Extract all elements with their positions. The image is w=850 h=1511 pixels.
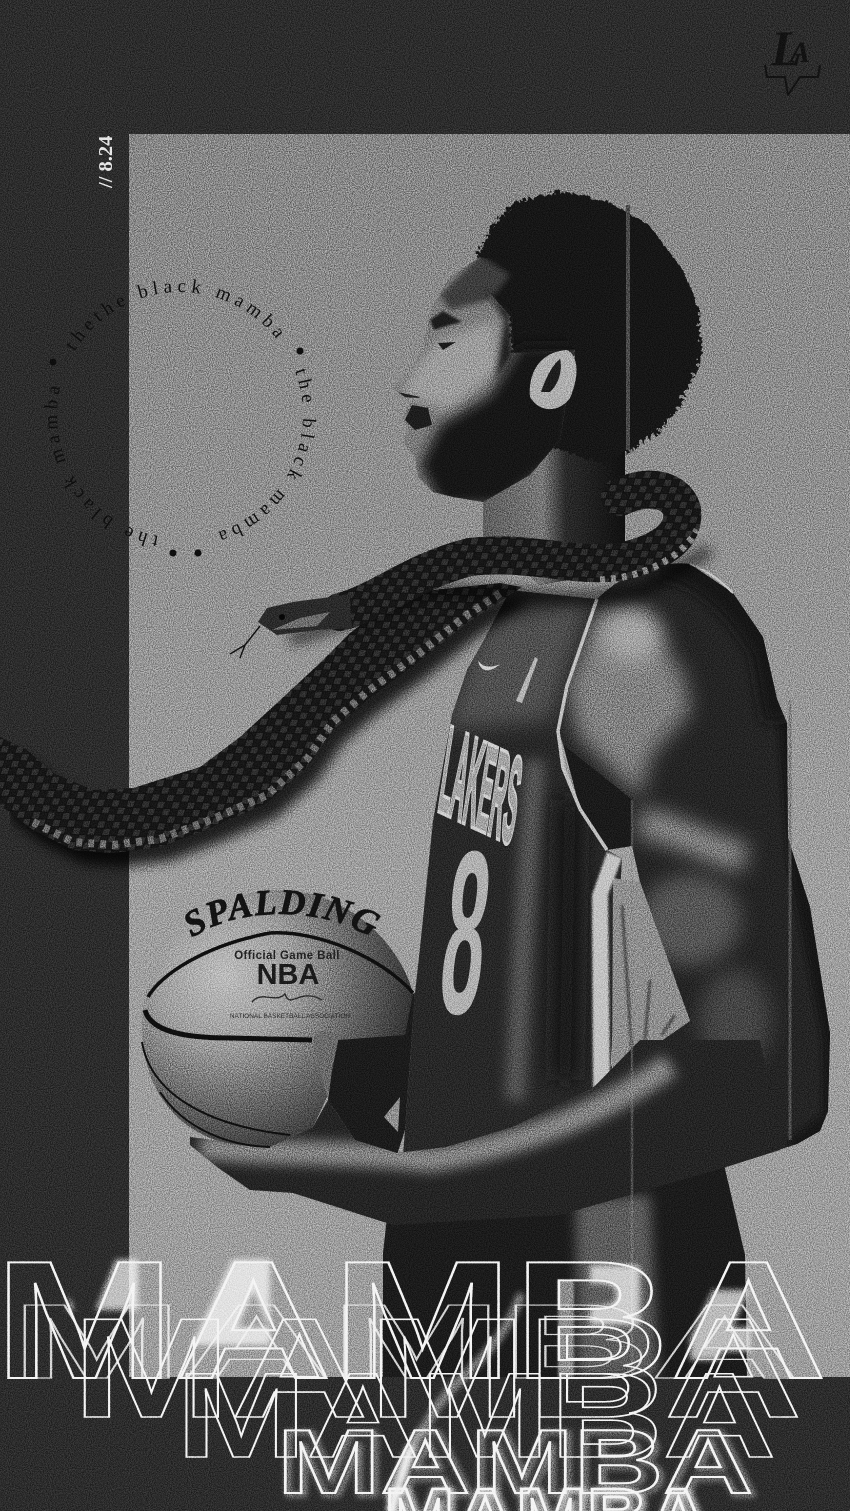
snake lower body <box>0 583 522 853</box>
eye <box>438 342 456 350</box>
shoulder highlight <box>602 610 662 662</box>
thumb <box>313 1031 338 1100</box>
icon: LA logo: L <box>770 20 802 76</box>
hair <box>475 189 700 462</box>
body side panel <box>612 878 690 1078</box>
ball NBA text: NBA <box>257 959 319 991</box>
lower arm mid tone <box>700 970 770 1070</box>
league logo <box>516 657 538 703</box>
player figure <box>190 189 835 1377</box>
vertical glitch streaks <box>628 205 790 1377</box>
forearm <box>190 1040 780 1225</box>
snake eye <box>279 614 285 620</box>
inner ear <box>541 359 561 392</box>
gap between hand and jersey <box>384 1097 400 1132</box>
ball seams <box>142 933 413 1147</box>
jersey shading <box>445 600 590 1100</box>
shorts folds <box>576 1195 658 1377</box>
dark hand and jersey block <box>328 993 415 1155</box>
face shading <box>398 255 580 505</box>
moustache and lips <box>405 405 432 430</box>
ball body <box>142 890 413 1147</box>
snake belly scales <box>33 590 505 845</box>
shorts <box>383 1160 747 1377</box>
icon: LA logo <box>765 20 820 95</box>
snake neck shadow <box>290 550 710 640</box>
ring phrase right: the black mamba <box>218 368 316 540</box>
strap trim <box>690 564 733 593</box>
jersey wordmark: LAKERS <box>433 703 528 870</box>
smoke wisp <box>392 1297 520 1511</box>
snake head <box>258 594 352 635</box>
arm shading <box>567 562 835 1150</box>
snake tongue <box>230 626 260 658</box>
ear <box>530 350 576 409</box>
snake upper band <box>340 490 682 612</box>
chest tone <box>445 600 590 730</box>
shoulder seam <box>648 708 690 745</box>
ball small print: NATIONAL BASKETBALL ASSOCIATION <box>230 1013 350 1020</box>
photo panel <box>129 134 850 1377</box>
lettering row 3: MAMBA <box>72 1289 802 1448</box>
sideburn <box>485 290 512 380</box>
side panel folds <box>622 905 675 1050</box>
ring phrase top right: black mamba <box>136 279 282 339</box>
swoosh <box>478 660 500 670</box>
armhole trim <box>558 599 607 850</box>
lettering row 2: MAMBA <box>11 1283 799 1401</box>
shorts stripe <box>558 1280 574 1377</box>
cheek and nose light <box>400 320 500 410</box>
temple shade <box>440 255 510 310</box>
lettering row 1: MAMBA <box>0 1226 827 1414</box>
ring separator dots <box>50 348 304 556</box>
glow row 1: MAMBA <box>0 1226 827 1414</box>
lettering row 5: MAMBA <box>277 1412 753 1511</box>
forearm highlight <box>200 1065 670 1160</box>
basketball <box>141 890 414 1148</box>
snake head light <box>272 612 330 630</box>
strap top <box>660 562 780 720</box>
nostril <box>398 392 420 402</box>
lettering row 4: MAMBA <box>176 1347 776 1483</box>
title lettering: MAMBA echoes <box>0 1226 827 1511</box>
ring phrase left: the black mamba <box>44 386 158 547</box>
brow <box>430 311 462 330</box>
ball brand arc guide <box>192 914 382 945</box>
date label: // 8.24 <box>95 136 117 189</box>
studio wall <box>129 134 850 1377</box>
triceps mid tone <box>640 875 740 965</box>
jersey dark fold <box>565 800 570 1080</box>
jersey <box>397 590 622 1230</box>
bicep light band <box>640 822 745 858</box>
armhole interior <box>563 744 633 850</box>
snake <box>0 490 710 853</box>
white side stripe <box>592 852 622 1088</box>
white glows on lettering <box>0 1226 827 1511</box>
neck <box>483 440 625 585</box>
jersey number: 8 <box>431 803 501 1062</box>
ball signature <box>252 994 322 1002</box>
circular text: the black mamba <box>44 279 316 556</box>
face <box>393 257 575 502</box>
ring phrase top: thethe <box>66 298 126 350</box>
icon: LA logo: A <box>788 36 810 69</box>
jersey fold light <box>515 760 535 1100</box>
ball official text: Official Game Ball <box>234 950 340 962</box>
ball brand: SPALDING <box>185 890 381 937</box>
upper arm <box>558 563 830 1190</box>
outer arm dark band <box>790 720 835 1150</box>
beard and jaw shadow <box>420 345 580 505</box>
snake coil light scales <box>600 530 697 580</box>
snake shadow <box>10 597 532 867</box>
shoulder light <box>567 612 690 797</box>
